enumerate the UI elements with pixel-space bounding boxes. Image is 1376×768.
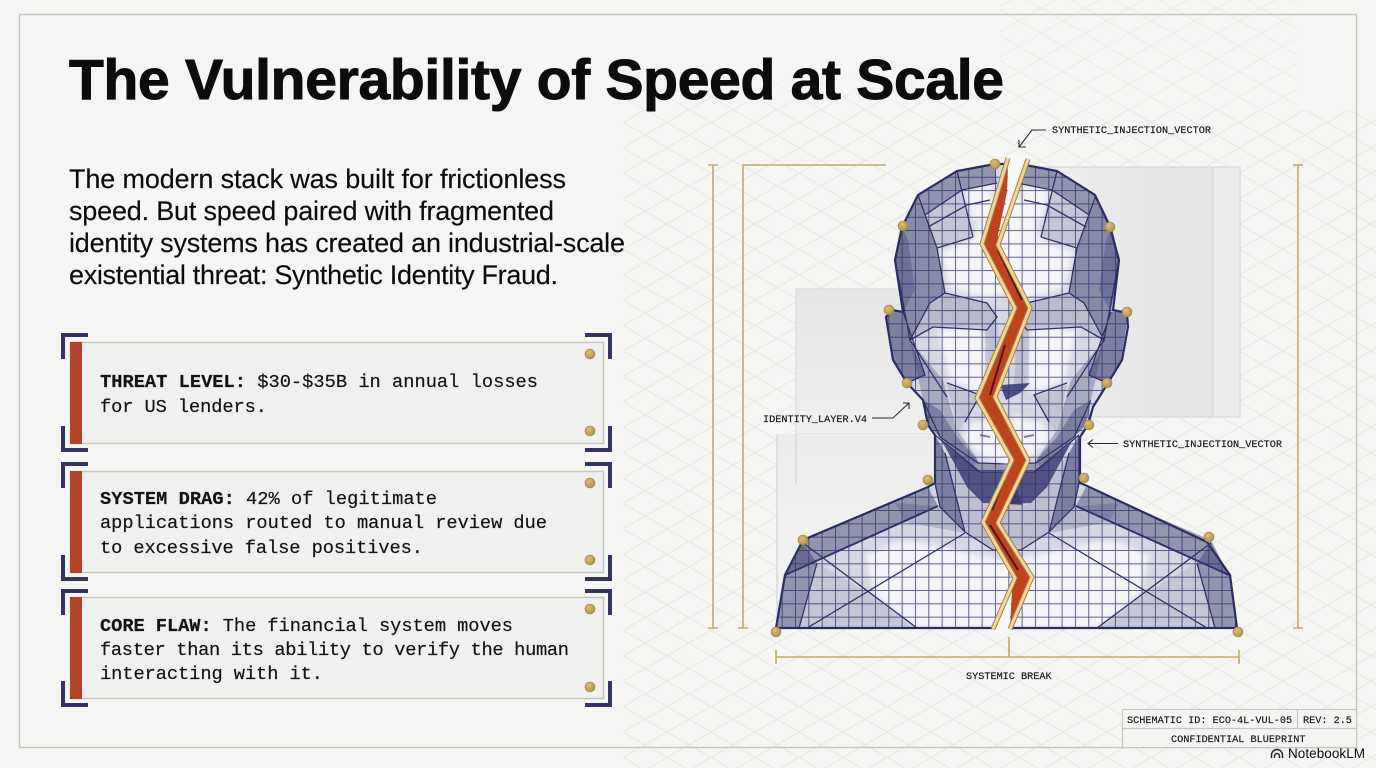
panel: threat level <box>63 335 610 450</box>
text: system drag: to excessive false positives. <box>100 537 423 559</box>
schematic title block: CONFIDENTIAL BLUEPRINT <box>1171 735 1306 746</box>
gold edges <box>977 158 1032 629</box>
text: core flaw: CORE FLAW: The financial system moves <box>100 615 513 637</box>
text: system drag: applications routed to manual review due <box>100 512 547 534</box>
rivets: core flaw <box>585 604 595 692</box>
text: core flaw: faster than its ability to verify the human <box>100 639 569 661</box>
schematic title block: SCHEMATIC ID: ECO-4L-VUL-05 <box>1127 716 1292 727</box>
silhouette base <box>776 164 1237 628</box>
text: system drag: SYSTEM DRAG: 42% of legitimate <box>100 488 437 510</box>
text: threat level: for US lenders. <box>100 396 267 418</box>
callout: identity layer: IDENTITY_LAYER.V4 <box>763 415 867 426</box>
right half mirrored <box>991 164 1238 628</box>
text: threat level: THREAT LEVEL: $30-$35B in annual losses <box>100 371 538 393</box>
isometric grid background <box>623 0 1376 768</box>
dimension lines <box>708 165 1303 664</box>
text: core flaw <box>100 615 569 685</box>
fracture gaps <box>998 155 1029 245</box>
dimension label: SYSTEMIC BREAK <box>966 672 1052 683</box>
central fracture <box>977 155 1032 632</box>
watermark: NotebookLM: NotebookLM <box>1288 746 1365 761</box>
wire grid <box>770 155 1250 635</box>
accent bar <box>70 342 82 444</box>
fracture shadow <box>990 250 1022 570</box>
silhouette outline <box>776 164 1237 628</box>
callout: synthetic injection vector top: SYNTHETIC_INJECTION_VECTOR <box>1052 126 1211 137</box>
nose shadow <box>1000 383 1030 400</box>
callout: synthetic injection vector side: SYNTHETIC_INJECTION_VECTOR <box>1123 440 1282 451</box>
panel: system drag <box>63 464 610 579</box>
callout: synthetic injection vector top <box>1019 126 1211 147</box>
corner brackets <box>63 591 610 705</box>
icon: notebook arcs <box>1272 750 1282 758</box>
accent bar <box>70 597 82 699</box>
anchor points <box>771 159 1243 637</box>
bright windows <box>865 183 1010 628</box>
title: The Vulnerability of Speed at Scale <box>69 48 1004 112</box>
backing panels <box>777 167 1240 628</box>
intro paragraph: existential threat: Synthetic Identity Fraud. <box>69 260 558 290</box>
callout: identity layer <box>763 403 909 426</box>
schematic title block: REV: 2.5 <box>1303 716 1352 727</box>
text: system drag <box>100 488 547 559</box>
rivets: threat level <box>585 349 595 436</box>
text: core flaw: interacting with it. <box>100 663 323 685</box>
corner brackets <box>63 464 610 579</box>
rivets: system drag <box>585 478 595 565</box>
head and torso wireframe <box>770 155 1250 635</box>
accent bar <box>70 471 82 573</box>
intro paragraph: identity systems has created an industrial-scale <box>69 228 625 258</box>
intro paragraph: speed. But speed paired with fragmented <box>69 196 554 226</box>
text: threat level <box>100 371 538 418</box>
panel: core flaw <box>63 591 610 705</box>
intro paragraph: The modern stack was built for frictionless <box>69 164 566 194</box>
left half shading and facets <box>776 164 1023 628</box>
schematic title block <box>1122 709 1357 748</box>
fracture fill <box>977 160 1032 629</box>
intro paragraph <box>69 164 625 290</box>
corner brackets <box>63 335 610 450</box>
